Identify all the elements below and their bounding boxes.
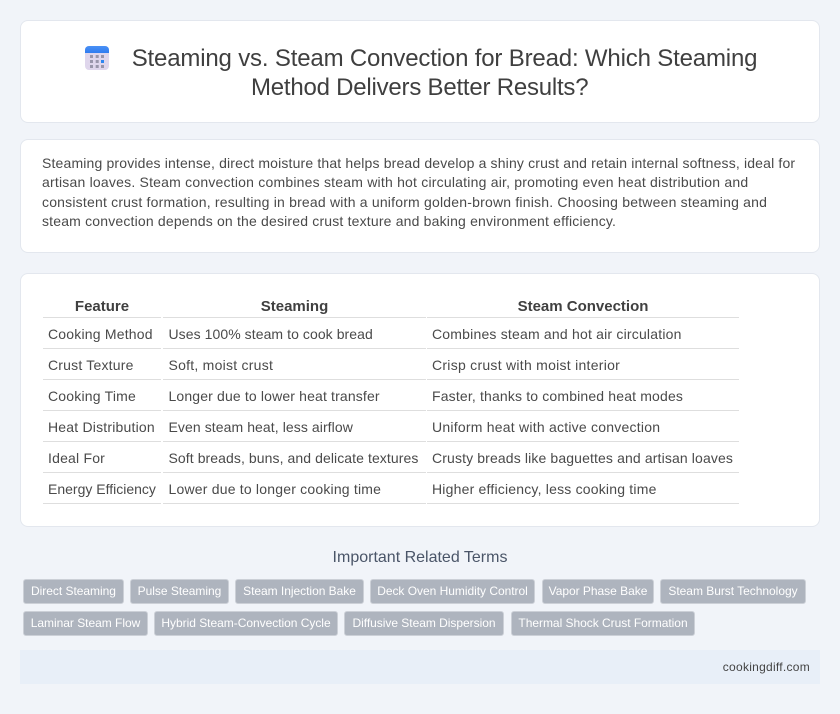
related term tags: Pulse Steaming — [138, 584, 221, 598]
table rows — [43, 317, 739, 504]
related term tags: Direct Steaming — [31, 584, 116, 598]
related term tags: Diffusive Steam Dispersion — [352, 616, 496, 630]
table rows: Even steam heat, less airflow — [168, 419, 353, 435]
table rows: Cooking Method — [48, 326, 153, 342]
table rows: Crisp crust with moist interior — [432, 357, 620, 373]
intro paragraph — [42, 155, 795, 229]
table rows: Crusty breads like baguettes and artisan loaves — [432, 450, 733, 466]
table rows: Uniform heat with active convection — [432, 419, 660, 435]
table rows: Ideal For — [48, 450, 105, 466]
table rows: Faster, thanks to combined heat modes — [432, 388, 683, 404]
table rows: Longer due to lower heat transfer — [168, 388, 380, 404]
title — [132, 45, 757, 101]
table header — [75, 298, 648, 315]
table header: Steam Convection — [518, 298, 648, 315]
related term tags: Steam Burst Technology — [668, 584, 798, 598]
related term tags: Deck Oven Humidity Control — [377, 584, 528, 598]
related term tags: Hybrid Steam-Convection Cycle — [161, 616, 331, 630]
table rows: Crust Texture — [48, 357, 134, 373]
intro text panel — [20, 139, 820, 253]
title: Method Delivers Better Results? — [251, 74, 588, 101]
related term tags: Steam Injection Bake — [243, 584, 356, 598]
intro paragraph: Steaming provides intense, direct moisture that helps bread develop a shiny crust and retain internal softness, ideal for — [42, 155, 795, 171]
comparison table panel — [20, 273, 820, 527]
title: Steaming vs. Steam Convection for Bread: Which Steaming — [132, 45, 757, 72]
related terms heading: Important Related Terms — [333, 548, 507, 566]
table rows: Cooking Time — [48, 388, 136, 404]
related term tags: Vapor Phase Bake — [549, 584, 647, 598]
intro paragraph: consistent crust formation, resulting in bread with a uniform golden-brown finish. Choosing between steaming and — [42, 194, 767, 210]
intro paragraph: artisan loaves. Steam convection combines steam with hot circulating air, promoting even heat distribution and — [42, 174, 748, 190]
table rows: Lower due to longer cooking time — [168, 481, 381, 497]
table header: Steaming — [261, 298, 328, 315]
table rows: Higher efficiency, less cooking time — [432, 481, 657, 497]
table header: Feature — [75, 298, 129, 315]
footer bar — [20, 650, 820, 684]
intro paragraph: steam convection depends on the desired crust texture and baking environment efficiency. — [42, 213, 616, 229]
source credit: cookingdiff.com — [723, 660, 810, 674]
icon: calendar — [85, 46, 109, 70]
table rows: Energy Efficiency — [48, 481, 156, 497]
related term tags — [23, 579, 806, 636]
table rows: Heat Distribution — [48, 419, 155, 435]
table rows: Combines steam and hot air circulation — [432, 326, 682, 342]
related term tags: Laminar Steam Flow — [31, 616, 140, 630]
header panel — [20, 20, 820, 123]
table rows: Soft, moist crust — [168, 357, 273, 373]
table rows: Uses 100% steam to cook bread — [168, 326, 373, 342]
related term tags: Thermal Shock Crust Formation — [518, 616, 688, 630]
table rows: Soft breads, buns, and delicate textures — [168, 450, 418, 466]
